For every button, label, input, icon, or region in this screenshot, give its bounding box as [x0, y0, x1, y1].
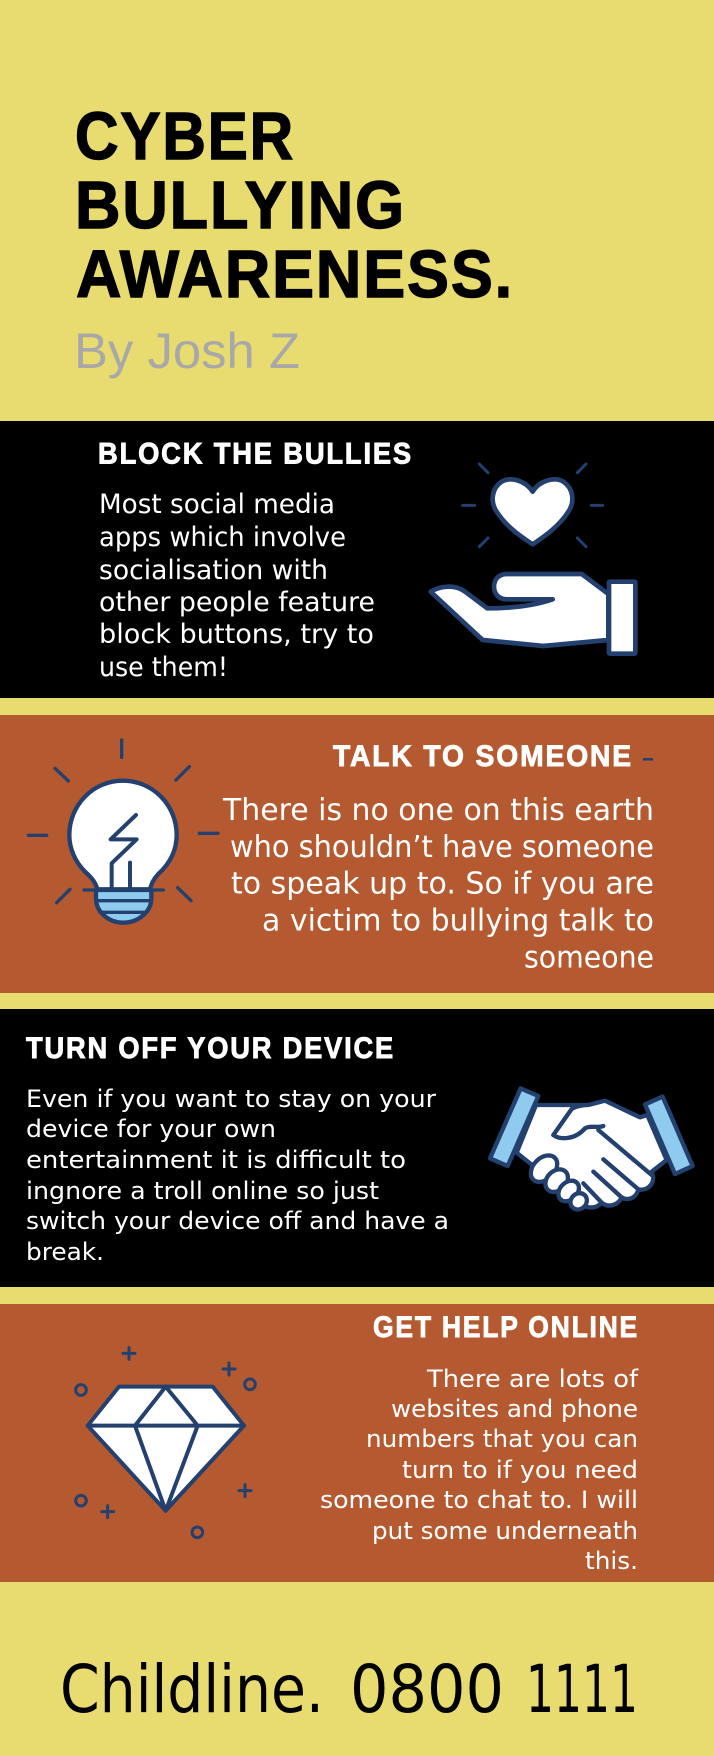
body text: block the bullies: block buttons, try to	[99, 619, 374, 650]
body text: get help online: numbers that you can	[366, 1425, 638, 1453]
icon: handshake	[490, 1088, 693, 1213]
body text: block the bullies: socialisation with	[99, 555, 328, 586]
panel: talk to someone	[0, 715, 714, 993]
body text: talk to someone	[222, 793, 654, 976]
body text: turn off your device: break.	[26, 1238, 104, 1266]
body text: get help online: websites and phone	[391, 1395, 638, 1423]
icon: hand holding heart	[431, 464, 635, 654]
body text: block the bullies: other people feature	[99, 587, 375, 618]
author byline: By Josh Z	[74, 323, 300, 379]
body text: get help online: this.	[585, 1547, 638, 1575]
body text: get help online: turn to if you need	[402, 1456, 638, 1484]
title	[75, 99, 514, 312]
body text: turn off your device	[26, 1085, 449, 1266]
body text: talk to someone: There is no one on this earth	[222, 793, 654, 828]
helpline footer: 1111	[526, 1651, 638, 1728]
dash accent	[643, 758, 653, 761]
body text: get help online	[320, 1365, 639, 1575]
panel: get help online	[0, 1304, 714, 1582]
body text: get help online: put some underneath	[372, 1517, 638, 1545]
icon: diamond	[76, 1348, 255, 1538]
title: CYBER	[75, 99, 295, 174]
body text: block the bullies	[99, 489, 375, 683]
body text: get help online: someone to chat to. I will	[320, 1486, 638, 1514]
panel: block the bullies	[0, 421, 714, 698]
heading: turn off your device: TURN OFF YOUR DEVICE	[26, 1032, 395, 1065]
body text: talk to someone: someone	[524, 940, 654, 976]
body text: turn off your device: Even if you want to stay on your	[26, 1085, 436, 1113]
icon: light bulb	[28, 740, 218, 923]
body text: block the bullies: use them!	[99, 652, 228, 683]
body text: block the bullies: apps which involve	[99, 522, 346, 553]
body text: talk to someone: who shouldn’t have someone	[230, 830, 654, 865]
heading: get help online: GET HELP ONLINE	[373, 1311, 639, 1344]
title: BULLYING	[75, 168, 406, 243]
body text: block the bullies: Most social media	[99, 489, 335, 520]
body text: turn off your device: entertainment it is difficult to	[26, 1146, 406, 1174]
body text: turn off your device: ingnore a troll online so just	[26, 1177, 379, 1205]
helpline footer: 0800	[350, 1651, 504, 1728]
heading: block the bullies: BLOCK THE BULLIES	[98, 438, 413, 470]
body text: get help online: There are lots of	[426, 1365, 639, 1393]
helpline footer: Childline.	[60, 1651, 324, 1728]
helpline footer	[60, 1651, 638, 1728]
body text: talk to someone: a victim to bullying talk to	[262, 904, 654, 938]
panel: turn off your device	[0, 1009, 714, 1287]
body text: talk to someone: to speak up to. So if you are	[231, 866, 654, 902]
body text: turn off your device: device for your own	[26, 1115, 276, 1143]
body text: turn off your device: switch your device off and have a	[26, 1207, 449, 1235]
title: AWARENESS.	[76, 237, 514, 312]
heading: talk to someone: TALK TO SOMEONE	[333, 740, 633, 773]
